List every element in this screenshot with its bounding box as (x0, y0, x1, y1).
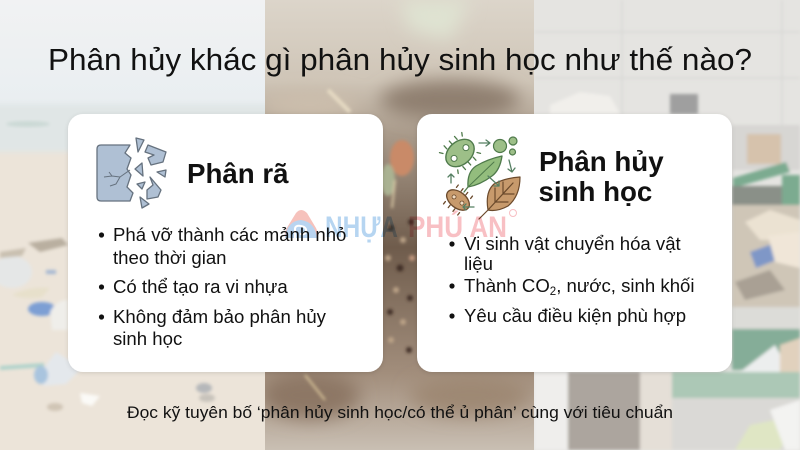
heading: phân hủy sinh học (538, 146, 664, 207)
bullet list: phân rã: Phá vỡ thành các mảnh nhỏ (113, 224, 346, 245)
panel: phân rã (68, 114, 383, 372)
background: recycling facility (534, 0, 800, 450)
bullet list: phân hủy sinh học: Yêu cầu điều kiện phù hợp (464, 305, 686, 326)
bullet list: phân hủy sinh học: Vi sinh vật chuyển hóa vật (464, 233, 682, 254)
footer note: Đọc kỹ tuyên bố ‘phân hủy sinh học/có thể ủ phân’ cùng với tiêu chuẩn (127, 403, 673, 422)
watermark: Nhựa Phú An logo: PHÚ AN (408, 210, 507, 244)
bullet list: phân rã: Không đảm bảo phân hủy (113, 306, 327, 327)
watermark: Nhựa Phú An logo (285, 210, 516, 244)
icon: biodegradation cycle (437, 130, 520, 219)
bullet list: phân rã: theo thời gian (113, 247, 227, 268)
panel: phân hủy sinh học (417, 114, 732, 372)
title: Phân hủy khác gì phân hủy sinh học như thế nào? (48, 43, 752, 77)
bullet list: phân hủy sinh học: liệu (464, 253, 493, 274)
background: beach with plastic litter (0, 103, 265, 450)
bullet list: phân rã: sinh học (113, 328, 182, 349)
heading: phân hủy sinh học: Phân hủy (539, 146, 664, 177)
bullet list: phân hủy sinh học: , nước, sinh khối (556, 275, 695, 296)
bullet list: phân rã (99, 224, 346, 349)
background: compost soil (260, 0, 534, 450)
heading: phân rã: Phân rã (187, 158, 289, 189)
soil texture around the card gap (385, 219, 415, 353)
icon: shattered fragments (97, 138, 166, 208)
bullet list: phân rã: Có thể tạo ra vi nhựa (113, 276, 288, 297)
bullet list: phân hủy sinh học (449, 233, 695, 326)
bullet list: phân hủy sinh học: Thành CO (464, 275, 550, 296)
heading: phân hủy sinh học: sinh học (538, 176, 652, 207)
watermark: Nhựa Phú An logo: NHỰA (325, 211, 398, 244)
bullet list: phân hủy sinh học: 2 (550, 286, 556, 298)
